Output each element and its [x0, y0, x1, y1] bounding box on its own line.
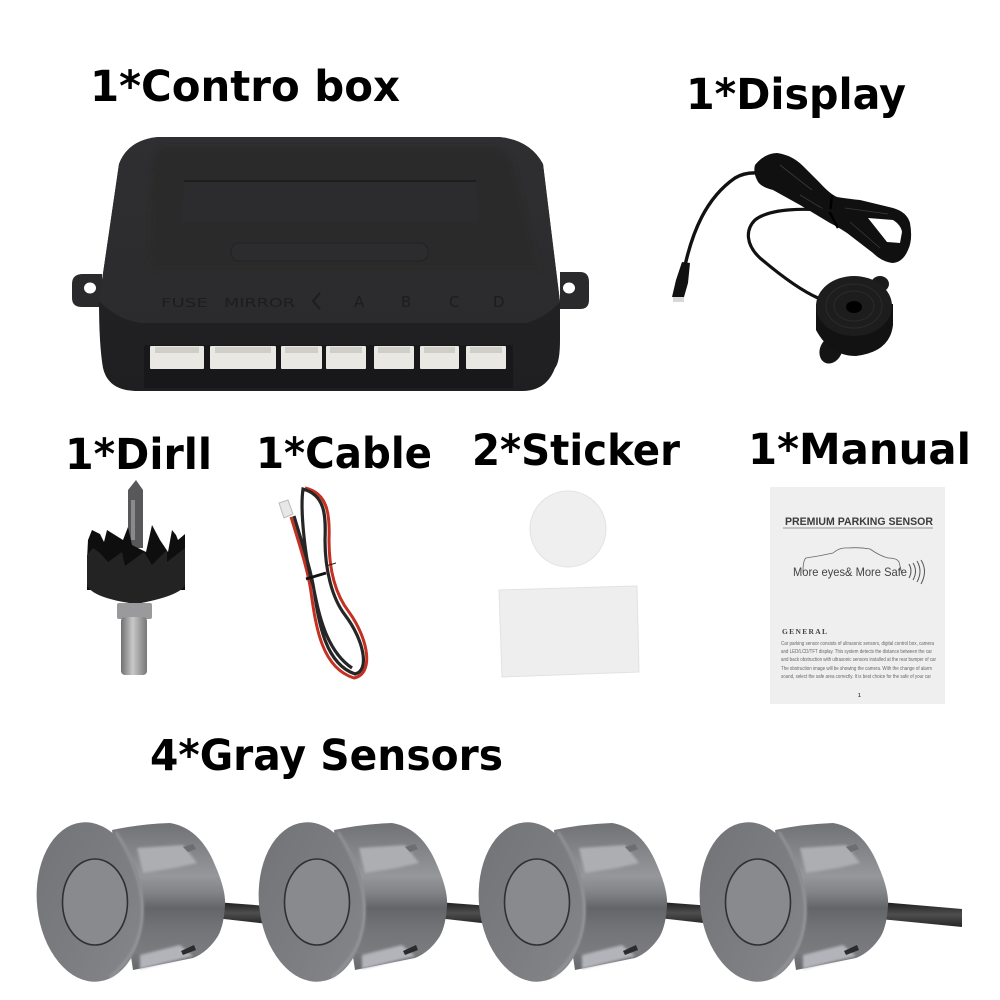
icon: control box: MIRROR [224, 296, 295, 310]
icon: sensor 3 [471, 817, 667, 987]
title: manual: 1*Manual [748, 425, 971, 475]
icon: control box: FUSE [161, 296, 208, 310]
icon: car outline [803, 548, 902, 574]
icon: sensor 2 [251, 817, 447, 987]
manual body text: Car parking sensor consists of ultrasonic sensors, digital control box, camera [781, 641, 934, 647]
title: drill: 1*Dirll [65, 430, 212, 480]
icon: sensor 4 [692, 817, 888, 987]
manual heading: PREMIUM PARKING SENSOR [785, 516, 933, 528]
title: sticker: 2*Sticker [472, 426, 681, 476]
icon: sensor 1 [29, 817, 225, 987]
icon: control box: D [493, 293, 505, 311]
icon: display buzzer with cable [672, 153, 911, 367]
icon: control box [72, 137, 589, 391]
manual body text: and LED/LCD/TFT display. This system detects the distance between the car [781, 649, 932, 655]
manual tagline: More eyes& More Safe [793, 565, 907, 579]
icon: square sticker [499, 586, 639, 677]
manual body text: and back obstruction with ultrasonic sensors installed at the rear bumper of car [781, 657, 936, 663]
icon: round sticker [530, 491, 606, 567]
manual general heading: GENERAL [782, 627, 827, 636]
manual body text: sound, select the safe area correctly. It is best choice for the safe of your car [781, 674, 931, 680]
icon: hole saw drill [87, 480, 185, 675]
icon: control box: C [449, 293, 459, 311]
title: gray sensors: 4*Gray Sensors [150, 731, 503, 781]
sensor wires [215, 902, 962, 927]
title: control box: 1*Contro box [90, 62, 400, 112]
manual heading rule [783, 527, 933, 529]
icon: control box: A [354, 293, 365, 311]
manual page number: 1 [858, 693, 861, 699]
title: cable: 1*Cable [256, 429, 432, 479]
manual booklet [770, 487, 945, 704]
icon: control box: B [401, 293, 411, 311]
icon: sound waves [909, 560, 924, 584]
manual body text [781, 641, 936, 680]
title: display: 1*Display [686, 70, 906, 120]
manual body text: The obstruction image will be showing the camera. With the change of alarm [781, 666, 932, 672]
icon: red and black cable [279, 488, 367, 678]
